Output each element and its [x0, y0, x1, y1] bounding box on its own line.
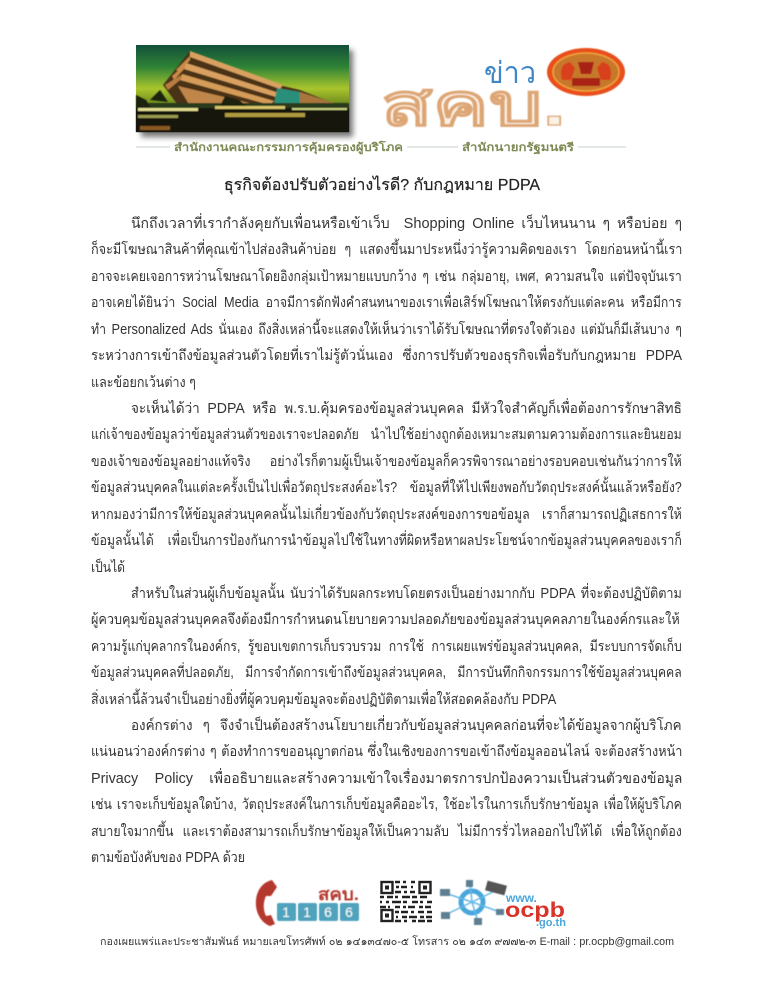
paragraph 3: สำหรับในส่วนผู้เก็บข้อมูลนั้น นับว่าได้รับผลกระทบโดยตรงเป็นอย่างมากกับ PDPA ที่จะต้องปฏิบัติตาม — [131, 585, 682, 602]
paragraph 4 — [91, 715, 682, 866]
footer contact line: กองเผยแพร่และประชาสัมพันธ์ หมายเลขโทรศัพท์ ๐๒ ๑๔๑๓๔๗๐-๕ โทรสาร ๐๒ ๑๔๓ ๙๗๗๒-๓ E-mail : pr.ocpb@gmail.com — [100, 936, 674, 948]
logo word: news: ข่าว — [484, 57, 536, 90]
paragraph 1: อาจจะเคยเจอการหว่านโฆษณาโดยอิงกลุ่มเป้าหมายแบบกว้าง ๆ เช่น กลุ่มอายุ, เพศ, ความสนใจ แต่ปัจจุบันเรา — [91, 269, 682, 285]
paragraph 1: นึกถึงเวลาที่เรากำลังคุยกับเพื่อนหรือเข้าเว็บ Shopping Online เว็บไหนนาน ๆ หรือบ่อย ๆ — [131, 215, 682, 232]
logo wordmark: สคบ. — [381, 73, 566, 138]
paragraph 1: ทำ Personalized Ads นั่นเอง ถึงสิ่งเหล่านี้จะแสดงให้เห็นว่าเราได้รับโฆษณาที่ตรงใจตัวเอง แต่มันก็มีเส้นบาง ๆ — [91, 321, 682, 338]
icon: hotline 1166 — [256, 880, 359, 926]
icon: hotline 1166: 1 — [282, 904, 290, 920]
paragraph 3 — [91, 582, 682, 708]
paragraph 1: ระหว่างการเข้าถึงข้อมูลส่วนตัวโดยที่เราไม่รู้ตัวนั่นเอง ซึ่งการปรับตัวของธุรกิจเพื่อรับกับกฎหมาย PDPA — [91, 347, 682, 364]
paragraph 4: Privacy Policy เพื่ออธิบายและสร้างความเข้าใจเรื่องมาตรการปกป้องความเป็นส่วนตัวของข้อมูล — [91, 770, 682, 787]
icon: hotline 1166: 1 — [303, 904, 311, 920]
paragraph 4: เช่น เราจะเก็บข้อมูลใดบ้าง, วัตถุประสงค์ในการเก็บข้อมูลคืออะไร, ใช้อะไรในการเก็บรักษาข้อมูล เพื่อให้ผู้บริโภค — [91, 797, 682, 813]
icon: hotline 1166: 6 — [345, 904, 353, 920]
header divider: agency names: สำนักงานคณะกรรมการคุ้มครองผู้บริโภค — [174, 140, 403, 155]
paragraph 2: หากมองว่ามีการให้ข้อมูลส่วนบุคคลนั้นไม่เกี่ยวข้องกับวัตถุประสงค์ของการขอข้อมูล เราก็สามารถปฏิเสธการให้ — [91, 507, 682, 523]
header divider: agency names: สำนักนายกรัฐมนตรี — [462, 141, 574, 155]
paragraph 4: แน่นอนว่าองค์กรต่าง ๆ ต้องทำการขออนุญาตก่อน ซึ่งในเชิงของการขอเข้าถึงข้อมูลออนไลน์ จะต้องสร้างหน้า — [91, 744, 682, 760]
website wordmark: .go.th — [536, 917, 566, 929]
paragraph 4: สบายใจมากขึ้น และเราต้องสามารถเก็บรักษาข้อมูลให้เป็นความลับ ไม่มีการรั่วไหลออกไปให้ได้ เพื่อให้ถูกต้อง — [91, 824, 682, 840]
paragraph 2: ของเจ้าของข้อมูลอย่างแท้จริง อย่างไรก็ตามผู้เป็นเจ้าของข้อมูลก็ควรพิจารณาอย่างรอบคอบเช่นกันว่าการให้ — [91, 454, 682, 470]
website wordmark: ocpb — [505, 899, 565, 922]
paragraph 2: ข้อมูลนั้นได้ เพื่อเป็นการป้องกันการนำข้อมูลไปใช้ในทางที่ผิดหรือหาผลประโยชน์จากข้อมูลส่วนบุคคลของเราก็ — [91, 533, 682, 549]
paragraph 2 — [91, 398, 682, 576]
paragraph 1: และข้อยกเว้นต่าง ๆ — [91, 375, 196, 391]
website wordmark: www. — [505, 891, 537, 905]
paragraph 4: ตามข้อบังคับของ PDPA ด้วย — [91, 849, 245, 866]
paragraph 3: ผู้ควบคุมข้อมูลส่วนบุคคลจึงต้องมีการกำหนดนโยบายความปลอดภัยของข้อมูลส่วนบุคคลภายในองค์กรและให้ — [91, 612, 680, 628]
icon: network graphic — [440, 880, 507, 925]
paragraph 1: ก็จะมีโฆษณาสินค้าที่คุณเข้าไปส่องสินค้าบ่อย ๆ แสดงขึ้นมาประหนึ่งว่ารู้ความคิดของเรา โดยก่อนหน้านี้เรา — [91, 242, 682, 258]
paragraph 4: องค์กรต่าง ๆ จึงจำเป็นต้องสร้างนโยบายเกี่ยวกับข้อมูลส่วนบุคคลก่อนที่จะได้ข้อมูลจากผู้บริโภค — [131, 718, 682, 734]
footer logos — [255, 879, 566, 929]
header divider: agency names — [136, 140, 626, 155]
paragraph 3: สิ่งเหล่านี้ล้วนจำเป็นอย่างยิ่งที่ผู้ควบคุมข้อมูลจะต้องปฏิบัติตามเพื่อให้สอดคล้องกับ PDPA — [91, 691, 556, 708]
icon: government seal — [547, 48, 625, 96]
paragraph 2: จะเห็นได้ว่า PDPA หรือ พ.ร.บ.คุ้มครองข้อมูลส่วนบุคคล มีหัวใจสำคัญก็เพื่อต้องการรักษาสิทธิ — [131, 400, 682, 417]
title: ธุรกิจต้องปรับตัวอย่างไรดี? กับกฎหมาย PDPA — [224, 177, 540, 194]
paragraph 3: ความรู้แก่บุคลากรในองค์กร, รู้ขอบเขตการเก็บรวบรวม การใช้ การเผยแพร่ข้อมูลส่วนบุคคล, มีระบบการจัดเก็บ — [91, 639, 682, 655]
header banner — [135, 45, 626, 155]
website wordmark — [505, 891, 566, 929]
paragraph 3: ข้อมูลส่วนบุคคลที่ปลอดภัย, มีการจำกัดการเข้าถึงข้อมูลส่วนบุคคล, มีการบันทึกกิจกรรมการใช้ข้อมูลส่วนบุคคล — [91, 665, 682, 681]
paragraph 1 — [91, 213, 682, 391]
icon: QR code — [380, 882, 432, 921]
photo: government building — [136, 45, 353, 137]
icon: hotline 1166: สคบ. — [318, 885, 359, 904]
paragraph 2: แก่เจ้าของข้อมูลว่าข้อมูลส่วนตัวของเราจะปลอดภัย นำไปใช้อย่างถูกต้องเหมาะสมตามความต้องการและยินยอม — [91, 427, 682, 443]
icon: hotline 1166: 6 — [324, 904, 332, 920]
paragraph 2: ข้อมูลส่วนบุคคลในแต่ละครั้งเป็นไปเพื่อวัตถุประสงค์อะไร? ข้อมูลที่ให้ไปเพียงพอกับวัตถุประสงค์นั้นแล้วหรือยัง? — [91, 480, 682, 496]
paragraph 1: อาจเคยได้ยินว่า Social Media อาจมีการดักฟังคำสนทนาของเราเพื่อเสิร์ฟโฆษณาให้ตรงกับแต่ละคน หรือมีการ — [91, 294, 682, 311]
paragraph 2: เป็นได้ — [91, 560, 125, 576]
